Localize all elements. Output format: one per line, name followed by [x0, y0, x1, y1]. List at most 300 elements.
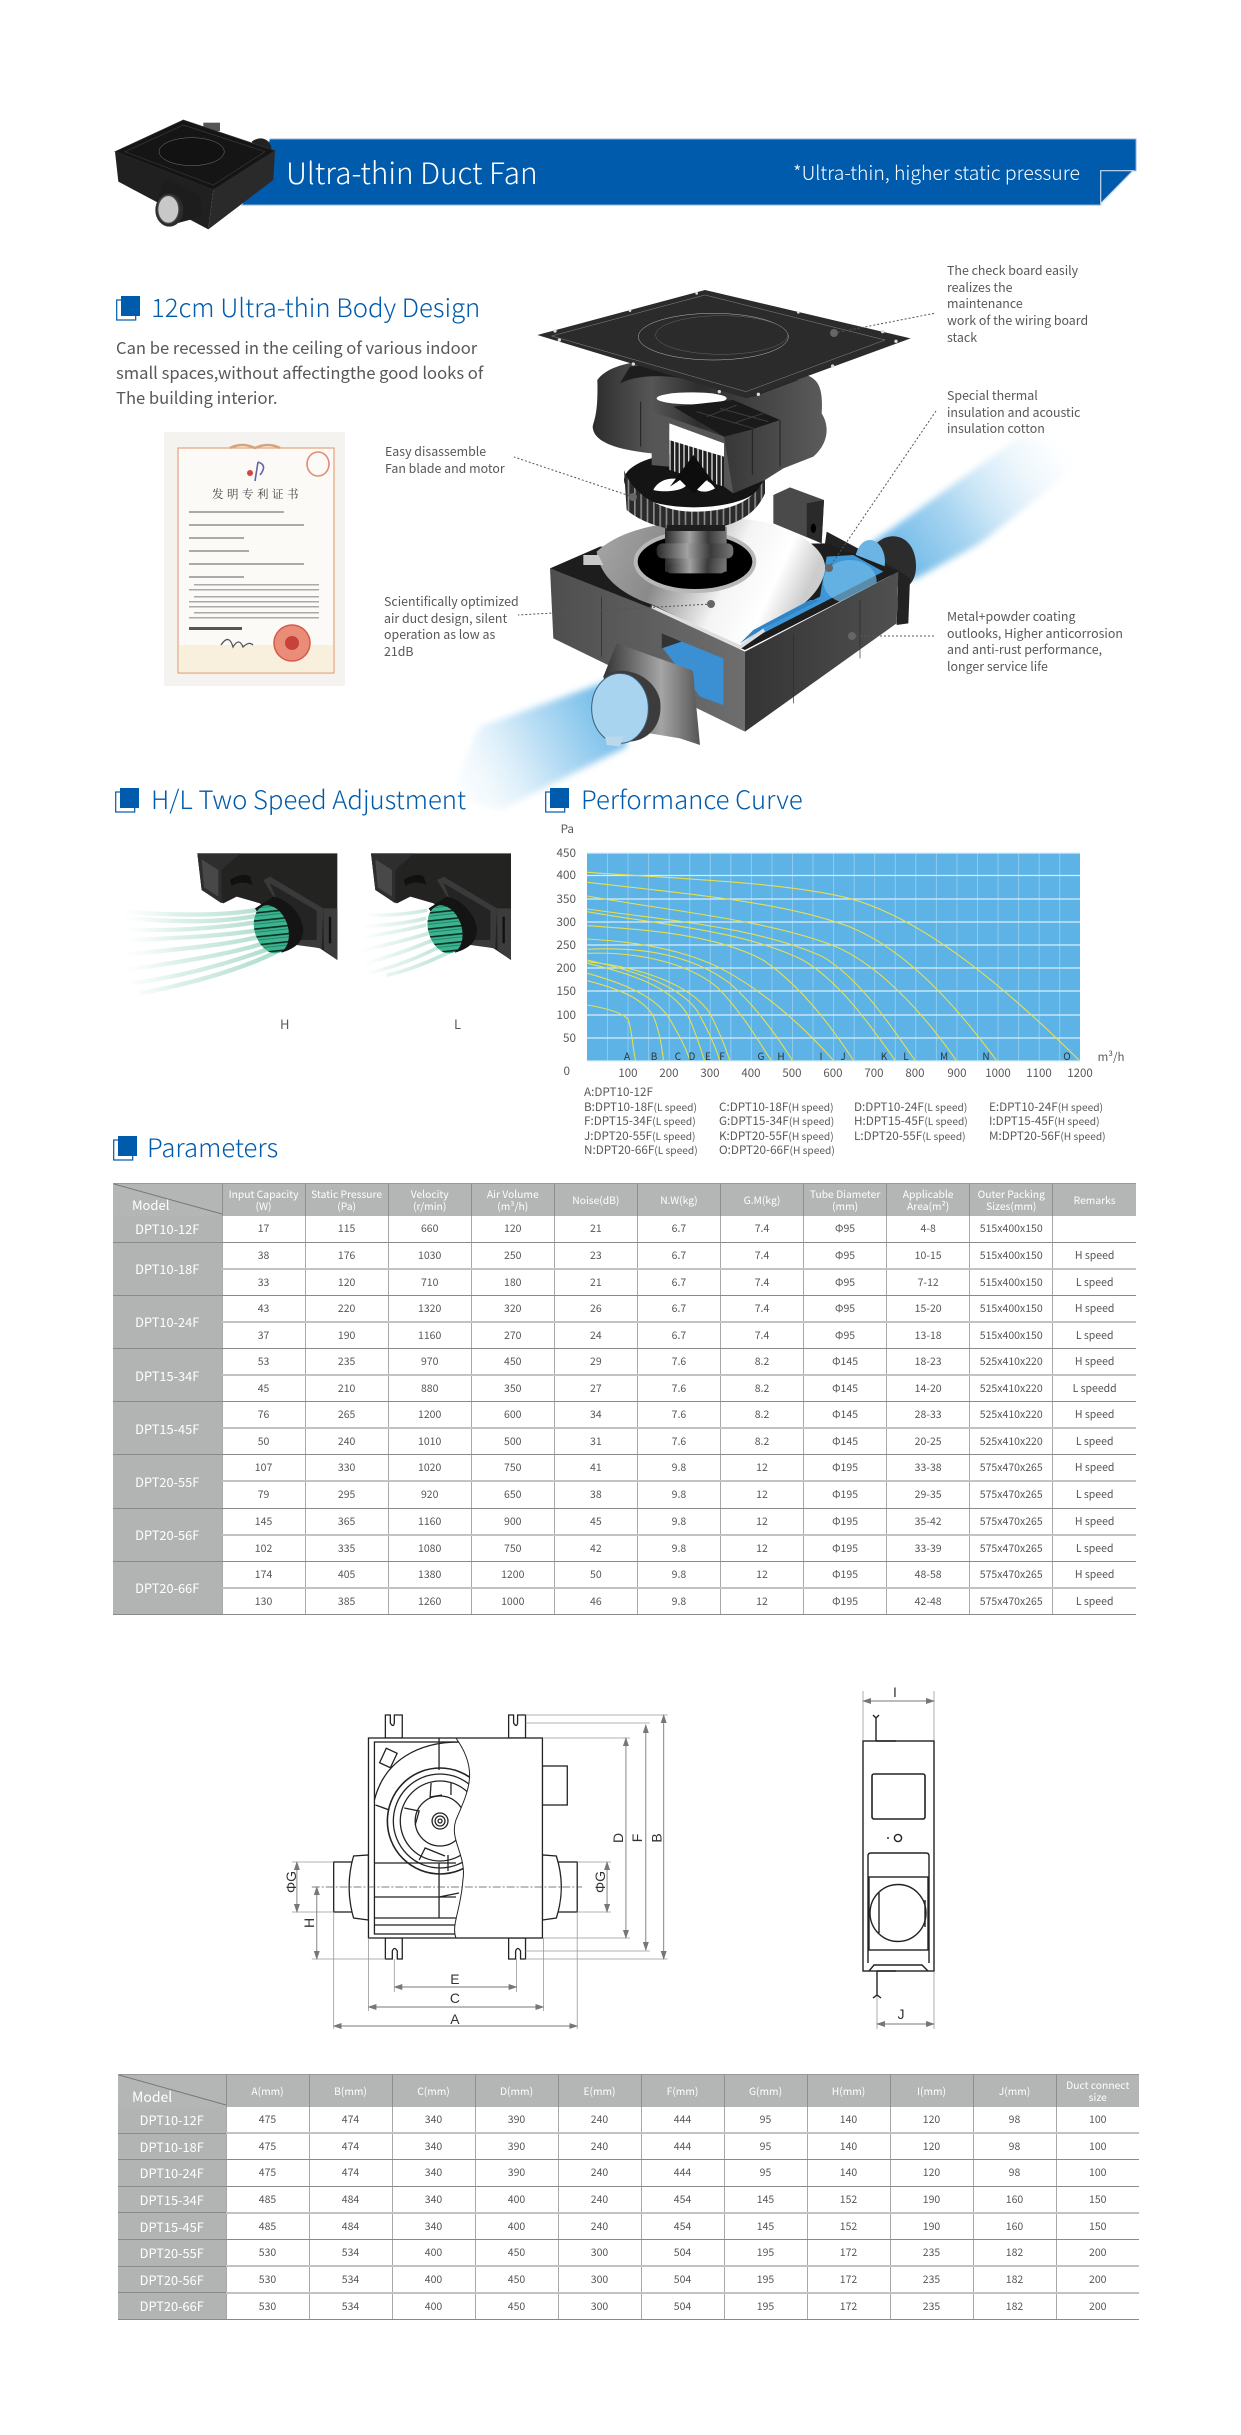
dimensions table: 400: [508, 2192, 525, 2207]
parameters table: Outer Packing: [978, 1186, 1045, 1201]
parameters table: 45: [258, 1381, 269, 1396]
label H: H: [280, 1014, 289, 1033]
dimensions table: 120: [923, 2165, 940, 2180]
parameters table: Sizes(mm): [986, 1198, 1036, 1213]
parameters table: 79: [258, 1487, 269, 1502]
parameters table: Φ95: [835, 1301, 855, 1316]
H and L speed fan photos: [140, 853, 511, 995]
parameters table: Φ195: [832, 1567, 858, 1582]
impeller blades band: [624, 470, 765, 531]
parameters table: 600: [504, 1407, 522, 1422]
parameters table: 29: [590, 1354, 602, 1369]
parameters table: 525x410x220: [980, 1381, 1043, 1396]
performance curve chart: 300: [700, 1065, 720, 1081]
performance curve chart: K: [881, 1048, 888, 1063]
parameters table: 107: [255, 1460, 272, 1475]
dimensions table: F(mm): [667, 2083, 698, 2098]
parameters table: 750: [504, 1460, 522, 1475]
parameters table: H speed: [1075, 1354, 1114, 1369]
parameters table: 515x400x150: [980, 1328, 1043, 1343]
parameters table: DPT10-12F: [135, 1219, 199, 1238]
label L: L: [454, 1014, 461, 1033]
chart legend: D:DPT10-24F(L speed): [854, 1098, 967, 1115]
parameters table: Remarks: [1074, 1192, 1116, 1207]
parameters table: 710: [421, 1275, 438, 1290]
patent certificate: [164, 432, 345, 686]
parameters table: L speed: [1076, 1434, 1113, 1449]
performance curve chart: F: [719, 1048, 725, 1063]
dimensions table: D(mm): [500, 2083, 533, 2098]
note: thermal insulation: Special thermal: [947, 386, 1038, 404]
note: air duct: [384, 592, 519, 660]
performance curve chart: 100: [618, 1065, 638, 1081]
parameters table: 270: [504, 1328, 522, 1343]
parameters table: DPT20-66F: [135, 1578, 199, 1597]
note: fan blade: [385, 442, 505, 477]
chart legend: O:DPT20-66F(H speed): [719, 1141, 835, 1158]
parameters table: 38: [258, 1248, 269, 1263]
parameters table: Noise(dB): [572, 1192, 619, 1207]
performance curve chart: [556, 820, 1124, 1081]
heading: parameters: Parameters: [147, 1128, 278, 1165]
parameters table: 17: [258, 1221, 269, 1236]
parameters table: 7-12: [918, 1275, 939, 1290]
parameters table: 7.6: [672, 1434, 686, 1449]
dimensions table: 160: [1006, 2219, 1023, 2234]
dimension drawing: front view: E: [450, 1971, 460, 1987]
parameters table: 26: [590, 1301, 602, 1316]
dimensions table: Duct connect: [1066, 2077, 1129, 2092]
dimension drawing: side view: J: [898, 2006, 904, 2022]
chart legend: M:DPT20-56F(H speed): [989, 1127, 1106, 1144]
parameters table: 190: [338, 1328, 355, 1343]
parameters table: H speed: [1075, 1248, 1114, 1263]
performance curve chart: 1200: [1067, 1065, 1093, 1081]
parameters table: 7.6: [672, 1354, 686, 1369]
parameters table: Φ195: [832, 1594, 858, 1609]
parameters table: DPT20-55F: [135, 1472, 199, 1491]
chart legend: F:DPT15-34F(L speed): [584, 1112, 696, 1129]
parameters table: 7.4: [755, 1275, 769, 1290]
parameters table: 24: [590, 1328, 602, 1343]
dimensions table: 150: [1089, 2219, 1106, 2234]
parameters table: 145: [255, 1514, 272, 1529]
dimensions table: DPT15-45F: [140, 2217, 204, 2236]
parameters table: 235: [338, 1354, 355, 1369]
performance curve chart: E: [705, 1048, 711, 1063]
dimensions table: 100: [1089, 2112, 1106, 2127]
performance curve chart: 50: [563, 1029, 576, 1046]
note: powder coating: Metal+powder coating: [947, 607, 1075, 625]
dimensions table: 454: [674, 2219, 691, 2234]
parameters table: L speed: [1076, 1275, 1113, 1290]
dimension drawing: front view: H: [301, 1918, 317, 1928]
dimensions table: 172: [840, 2245, 857, 2260]
dimensions table: 390: [508, 2112, 525, 2127]
dimensions table: 240: [591, 2112, 608, 2127]
parameters table: 220: [338, 1301, 355, 1316]
dimension drawing: front view: ΦG: [592, 1871, 608, 1893]
text block: body design description: Can be recessed in the ceiling of various indoor: [116, 335, 477, 359]
parameters table: 350: [504, 1381, 522, 1396]
parameters table: 7.4: [755, 1221, 769, 1236]
chart legend: I:DPT15-45F(H speed): [989, 1112, 1100, 1129]
dimensions table: 390: [508, 2139, 525, 2154]
dimensions table: 504: [674, 2272, 691, 2287]
chart legend: L:DPT20-55F(L speed): [854, 1127, 966, 1144]
rim strip: [652, 605, 765, 649]
parameters table: 174: [255, 1567, 272, 1582]
dimension drawing: side view: [862, 1684, 935, 2029]
dimensions table: 300: [591, 2299, 608, 2314]
dimension drawing: front view: A: [450, 2011, 460, 2027]
parameters table: 15-20: [915, 1301, 942, 1316]
dimensions table: 172: [840, 2272, 857, 2287]
dimensions table: 475: [259, 2139, 276, 2154]
parameters table: 35-42: [915, 1514, 942, 1529]
dimensions table: B(mm): [334, 2083, 367, 2098]
parameters table: 9.8: [672, 1487, 686, 1502]
parameters table: 900: [504, 1514, 522, 1529]
dimensions table: 390: [508, 2165, 525, 2180]
parameters table: (W): [256, 1198, 272, 1213]
dimensions table: 145: [757, 2219, 774, 2234]
performance curve chart: 450: [557, 844, 576, 861]
dimensions table: A(mm): [251, 2083, 284, 2098]
parameters table: Φ145: [832, 1434, 858, 1449]
parameters table: 575x470x265: [980, 1460, 1043, 1475]
parameters table: DPT15-34F: [135, 1366, 199, 1385]
control box: [773, 487, 824, 543]
dimensions table: 240: [591, 2219, 608, 2234]
parameters table: 525x410x220: [980, 1354, 1043, 1369]
chart legend: K:DPT20-55F(H speed): [719, 1127, 834, 1144]
banner: header ribbon: [241, 138, 1136, 206]
dimensions table: 450: [508, 2245, 525, 2260]
parameters table: 515x400x150: [980, 1248, 1043, 1263]
dimensions table: 300: [591, 2272, 608, 2287]
dimensions table: 98: [1009, 2112, 1020, 2127]
dimension drawing: front view: F: [629, 1834, 645, 1842]
parameters table: L speed: [1076, 1487, 1113, 1502]
dimensions table: 195: [757, 2299, 774, 2314]
parameters table: Φ95: [835, 1328, 855, 1343]
dimensions table: 450: [508, 2272, 525, 2287]
dimensions table: 530: [259, 2299, 276, 2314]
parameters table: DPT10-24F: [135, 1312, 199, 1331]
performance curve chart: 400: [557, 866, 576, 883]
dimension drawing: front view: D: [610, 1833, 626, 1843]
note: powder coating: and anti-rust performance,: [947, 640, 1102, 658]
parameters table: 33-38: [915, 1460, 942, 1475]
dimensions table: 534: [342, 2272, 359, 2287]
parameters table: 1160: [418, 1328, 441, 1343]
dimensions table: 120: [923, 2112, 940, 2127]
dimensions table: 235: [923, 2245, 940, 2260]
parameters table: 6.7: [672, 1248, 686, 1263]
note: powder coating: [947, 607, 1123, 675]
dimensions table: 140: [840, 2112, 857, 2127]
parameters table: 53: [258, 1354, 269, 1369]
dimensions table: 182: [1006, 2245, 1023, 2260]
parameters table: 27: [590, 1381, 602, 1396]
silver disk: [597, 518, 825, 647]
dimensions table: 534: [342, 2245, 359, 2260]
parameters table: Φ195: [832, 1541, 858, 1556]
parameters table: 575x470x265: [980, 1567, 1043, 1582]
dimensions table: 152: [840, 2192, 857, 2207]
dimensions table: 340: [425, 2112, 442, 2127]
dimensions table: 444: [674, 2165, 691, 2180]
parameters table: 28-33: [915, 1407, 942, 1422]
dimensions table: 340: [425, 2165, 442, 2180]
parameters table: [113, 1183, 1136, 1615]
heading: performance curve: Performance Curve: [581, 780, 803, 817]
parameters table: 50: [590, 1567, 602, 1582]
performance curve chart: M: [940, 1048, 948, 1063]
parameters table: 9.8: [672, 1594, 686, 1609]
parameters table: 115: [338, 1221, 355, 1236]
chart legend: J:DPT20-55F(L speed): [584, 1127, 695, 1144]
dimensions table: 240: [591, 2192, 608, 2207]
motor: [665, 527, 727, 572]
performance curve chart: Pa: [561, 820, 574, 837]
parameters table: Static Pressure: [311, 1186, 382, 1201]
dimensions table: 400: [508, 2219, 525, 2234]
dimensions table: 172: [840, 2299, 857, 2314]
dimensions table: 475: [259, 2112, 276, 2127]
note: fan blade: Fan blade and motor: [385, 459, 505, 477]
dimensions table: DPT20-56F: [140, 2270, 204, 2289]
performance curve chart: 500: [782, 1065, 802, 1081]
parameters table: 1010: [418, 1434, 441, 1449]
performance curve chart: 1000: [985, 1065, 1011, 1081]
parameters table: 6.7: [672, 1301, 686, 1316]
air stream right: [867, 437, 1107, 580]
dimensions table: 474: [342, 2139, 359, 2154]
parameters table: 6.7: [672, 1328, 686, 1343]
dimensions table: 530: [259, 2245, 276, 2260]
parameters table: 515x400x150: [980, 1301, 1043, 1316]
parameters table: (Pa): [337, 1198, 356, 1213]
parameters table: H speed: [1075, 1407, 1114, 1422]
text block: body design description: The building interior.: [116, 385, 278, 409]
note: check board: work of the wiring board: [947, 311, 1088, 329]
icon: duct fan product in banner: [114, 120, 276, 230]
parameters table: Φ95: [835, 1275, 855, 1290]
top plate: [537, 290, 911, 398]
parameters table: Φ195: [832, 1487, 858, 1502]
text block: body design description: small spaces,without affectingthe good looks of: [116, 360, 483, 384]
dimensions table: 530: [259, 2272, 276, 2287]
dimensions table: G(mm): [749, 2083, 782, 2098]
parameters table: 50: [258, 1434, 269, 1449]
dimensions table: 140: [840, 2165, 857, 2180]
chart legend: C:DPT10-18F(H speed): [719, 1098, 834, 1115]
performance curve chart: 150: [557, 982, 576, 999]
parameters table: (mm): [832, 1198, 858, 1213]
parameters table: 525x410x220: [980, 1407, 1043, 1422]
dimensions table: 152: [840, 2219, 857, 2234]
parameters table: 9.8: [672, 1514, 686, 1529]
dimensions table: 444: [674, 2112, 691, 2127]
note: thermal insulation: insulation and acoustic: [947, 403, 1080, 421]
parameters table: 515x400x150: [980, 1221, 1043, 1236]
performance curve chart: I: [820, 1048, 822, 1063]
parameters table: 405: [338, 1567, 355, 1582]
volute housing: [593, 360, 827, 493]
parameters table: G.M(kg): [744, 1192, 780, 1207]
dimensions table: 235: [923, 2299, 940, 2314]
dimensions table: 120: [923, 2139, 940, 2154]
note: powder coating: longer service life: [947, 657, 1048, 675]
note: fan blade: Easy disassemble: [385, 442, 486, 460]
note: check board: maintenance: [947, 294, 1023, 312]
performance curve chart: O: [1063, 1048, 1071, 1063]
dimensions table: 182: [1006, 2272, 1023, 2287]
parameters table: 130: [255, 1594, 272, 1609]
parameters table: 12: [756, 1460, 768, 1475]
parameters table: 45: [590, 1514, 602, 1529]
performance curve chart: 1100: [1026, 1065, 1052, 1081]
parameters table: 6.7: [672, 1275, 686, 1290]
dimensions table: 340: [425, 2139, 442, 2154]
parameters table: 120: [504, 1221, 522, 1236]
dimensions table: J(mm): [999, 2083, 1030, 2098]
parameters table: H speed: [1075, 1514, 1114, 1529]
parameters table: 6.7: [672, 1221, 686, 1236]
dimensions table: 300: [591, 2245, 608, 2260]
chart legend: A:DPT10-12F: [584, 1083, 653, 1100]
dimensions table: 485: [259, 2219, 276, 2234]
parameters table: 650: [504, 1487, 522, 1502]
parameters table: 575x470x265: [980, 1514, 1043, 1529]
performance curve chart: 0: [564, 1062, 570, 1079]
chart legend: N:DPT20-66F(L speed): [584, 1141, 698, 1158]
chart legend: B:DPT10-18F(L speed): [584, 1098, 697, 1115]
parameters table: 9.8: [672, 1460, 686, 1475]
dimensions table: 95: [760, 2139, 771, 2154]
dimensions table: 444: [674, 2139, 691, 2154]
note: air duct: operation as low as: [384, 625, 495, 643]
parameters table: 1080: [418, 1541, 441, 1556]
dimensions table: 200: [1089, 2272, 1106, 2287]
parameters table: L speedd: [1073, 1381, 1117, 1396]
parameters table: L speed: [1076, 1328, 1113, 1343]
parameters table: 4-8: [920, 1221, 936, 1236]
dimensions table: 190: [923, 2192, 940, 2207]
performance curve chart: A: [624, 1048, 631, 1063]
dimensions table: DPT20-66F: [140, 2296, 204, 2315]
box interior: [550, 543, 898, 650]
parameters table: 365: [338, 1514, 355, 1529]
parameters table: 920: [421, 1487, 438, 1502]
parameters table: 12: [756, 1594, 768, 1609]
dimensions table: 195: [757, 2272, 774, 2287]
parameters table: 14-20: [915, 1381, 942, 1396]
parameters table: 335: [338, 1541, 355, 1556]
parameters table: 38: [590, 1487, 602, 1502]
parameters table: 750: [504, 1541, 522, 1556]
parameters table: 330: [338, 1460, 355, 1475]
parameters table: 575x470x265: [980, 1594, 1043, 1609]
dimensions table: 98: [1009, 2165, 1020, 2180]
parameters table: Area(m²): [907, 1198, 949, 1213]
dimensions table: 484: [342, 2219, 359, 2234]
performance curve chart: 300: [557, 913, 576, 930]
parameters table: L speed: [1076, 1541, 1113, 1556]
parameters table: 1380: [418, 1567, 441, 1582]
parameters table: 21: [590, 1221, 602, 1236]
dimensions table: size: [1089, 2089, 1107, 2104]
parameters table: 265: [338, 1407, 355, 1422]
dimensions table: 200: [1089, 2299, 1106, 2314]
parameters table: Air Volume: [487, 1186, 539, 1201]
parameters table: 1160: [418, 1514, 441, 1529]
parameters table: DPT10-18F: [135, 1259, 199, 1278]
dimensions table: 235: [923, 2272, 940, 2287]
dimensions table: 504: [674, 2299, 691, 2314]
dimensions table: 474: [342, 2112, 359, 2127]
parameters table: 7.4: [755, 1301, 769, 1316]
dimensions table: 145: [757, 2192, 774, 2207]
performance curve chart: J: [840, 1048, 846, 1063]
parameters table: 76: [258, 1407, 269, 1422]
performance curve chart: 100: [557, 1006, 576, 1023]
dimensions table: 190: [923, 2219, 940, 2234]
parameters table: L speed: [1076, 1594, 1113, 1609]
front duct: [603, 643, 700, 745]
parameters table: Velocity: [411, 1186, 449, 1201]
parameters table: 1320: [418, 1301, 441, 1316]
dimensions table: 534: [342, 2299, 359, 2314]
parameters table: 48-58: [915, 1567, 942, 1582]
performance curve chart: 800: [905, 1065, 925, 1081]
air stream left: [447, 677, 627, 810]
dimensions table: 98: [1009, 2139, 1020, 2154]
parameters table: 8.2: [755, 1434, 769, 1449]
chart legend: E:DPT10-24F(H speed): [989, 1098, 1103, 1115]
note: air duct: air duct design, silent: [384, 609, 507, 627]
box faces: [550, 568, 745, 732]
parameters table: 12: [756, 1514, 768, 1529]
parameters table: 7.6: [672, 1407, 686, 1422]
dimensions table: 240: [591, 2139, 608, 2154]
subtitle: *Ultra-thin, higher static pressure: [793, 157, 1080, 186]
parameters table: 7.4: [755, 1248, 769, 1263]
parameters table: H speed: [1075, 1460, 1114, 1475]
dimensions table: DPT10-24F: [140, 2163, 204, 2182]
dimensions table: 504: [674, 2245, 691, 2260]
impeller: [624, 453, 764, 507]
right duct: [873, 536, 916, 590]
dimensions table: I(mm): [917, 2083, 946, 2098]
parameters table: 295: [338, 1487, 355, 1502]
parameters table: 37: [258, 1328, 269, 1343]
parameters table: 13-18: [915, 1328, 942, 1343]
dimensions table: H(mm): [832, 2083, 865, 2098]
note: check board: The check board easily: [947, 261, 1078, 279]
note: check board: realizes the: [947, 278, 1012, 296]
note: thermal insulation: [947, 386, 1080, 437]
dimensions table: [118, 2074, 1139, 2320]
parameters table: 7.4: [755, 1328, 769, 1343]
dimensions table: 182: [1006, 2299, 1023, 2314]
parameters table: Input Capacity: [229, 1186, 298, 1201]
dimensions table: C(mm): [417, 2083, 450, 2098]
dimension drawing: front view: ΦG: [283, 1871, 299, 1893]
dimension drawing: front view: C: [450, 1990, 460, 2006]
